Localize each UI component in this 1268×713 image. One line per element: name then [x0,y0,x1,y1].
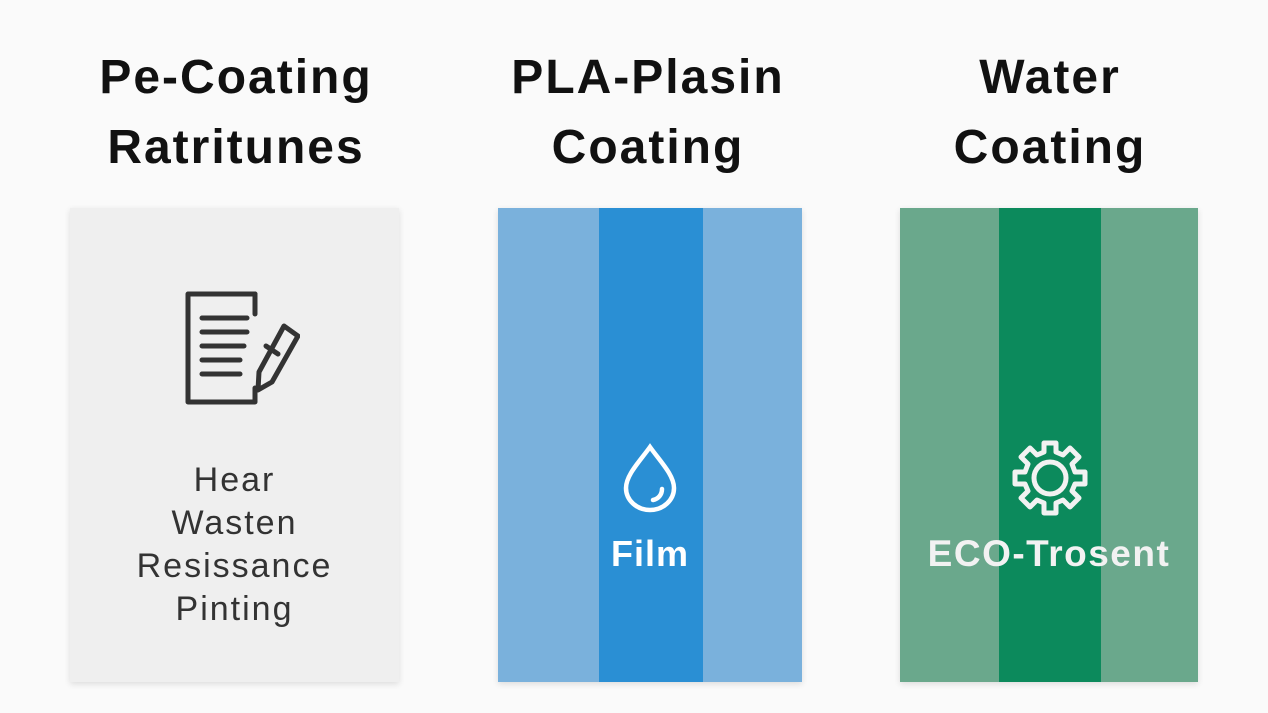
icon: document with pencil [186,292,300,404]
icon: gear [1012,440,1088,516]
title: Pe-Coating [99,51,373,174]
title: Water [954,51,1146,174]
text block: Hear [194,461,275,499]
icon: water drop [624,443,676,512]
text block: Pinting [176,590,293,628]
title: PLA [511,51,785,174]
title: Pe-Coating: Pe-Coating [99,51,373,104]
panel: PLA [498,208,802,682]
label: Film: Film [611,533,689,574]
title: PLA: Coating [552,121,744,174]
title: Water: Coating [954,121,1146,174]
text block: Wasten [171,504,298,542]
title: Pe-Coating: Ratritunes [107,121,365,174]
title: Water: Water [979,51,1121,104]
panel: Water [900,208,1198,682]
text block: Resissance [137,547,332,585]
panel: PE [70,208,399,682]
label: ECO-Trosent: ECO-Trosent [928,533,1170,574]
title: PLA: PLA-Plasin [511,51,785,104]
text block [137,461,332,628]
